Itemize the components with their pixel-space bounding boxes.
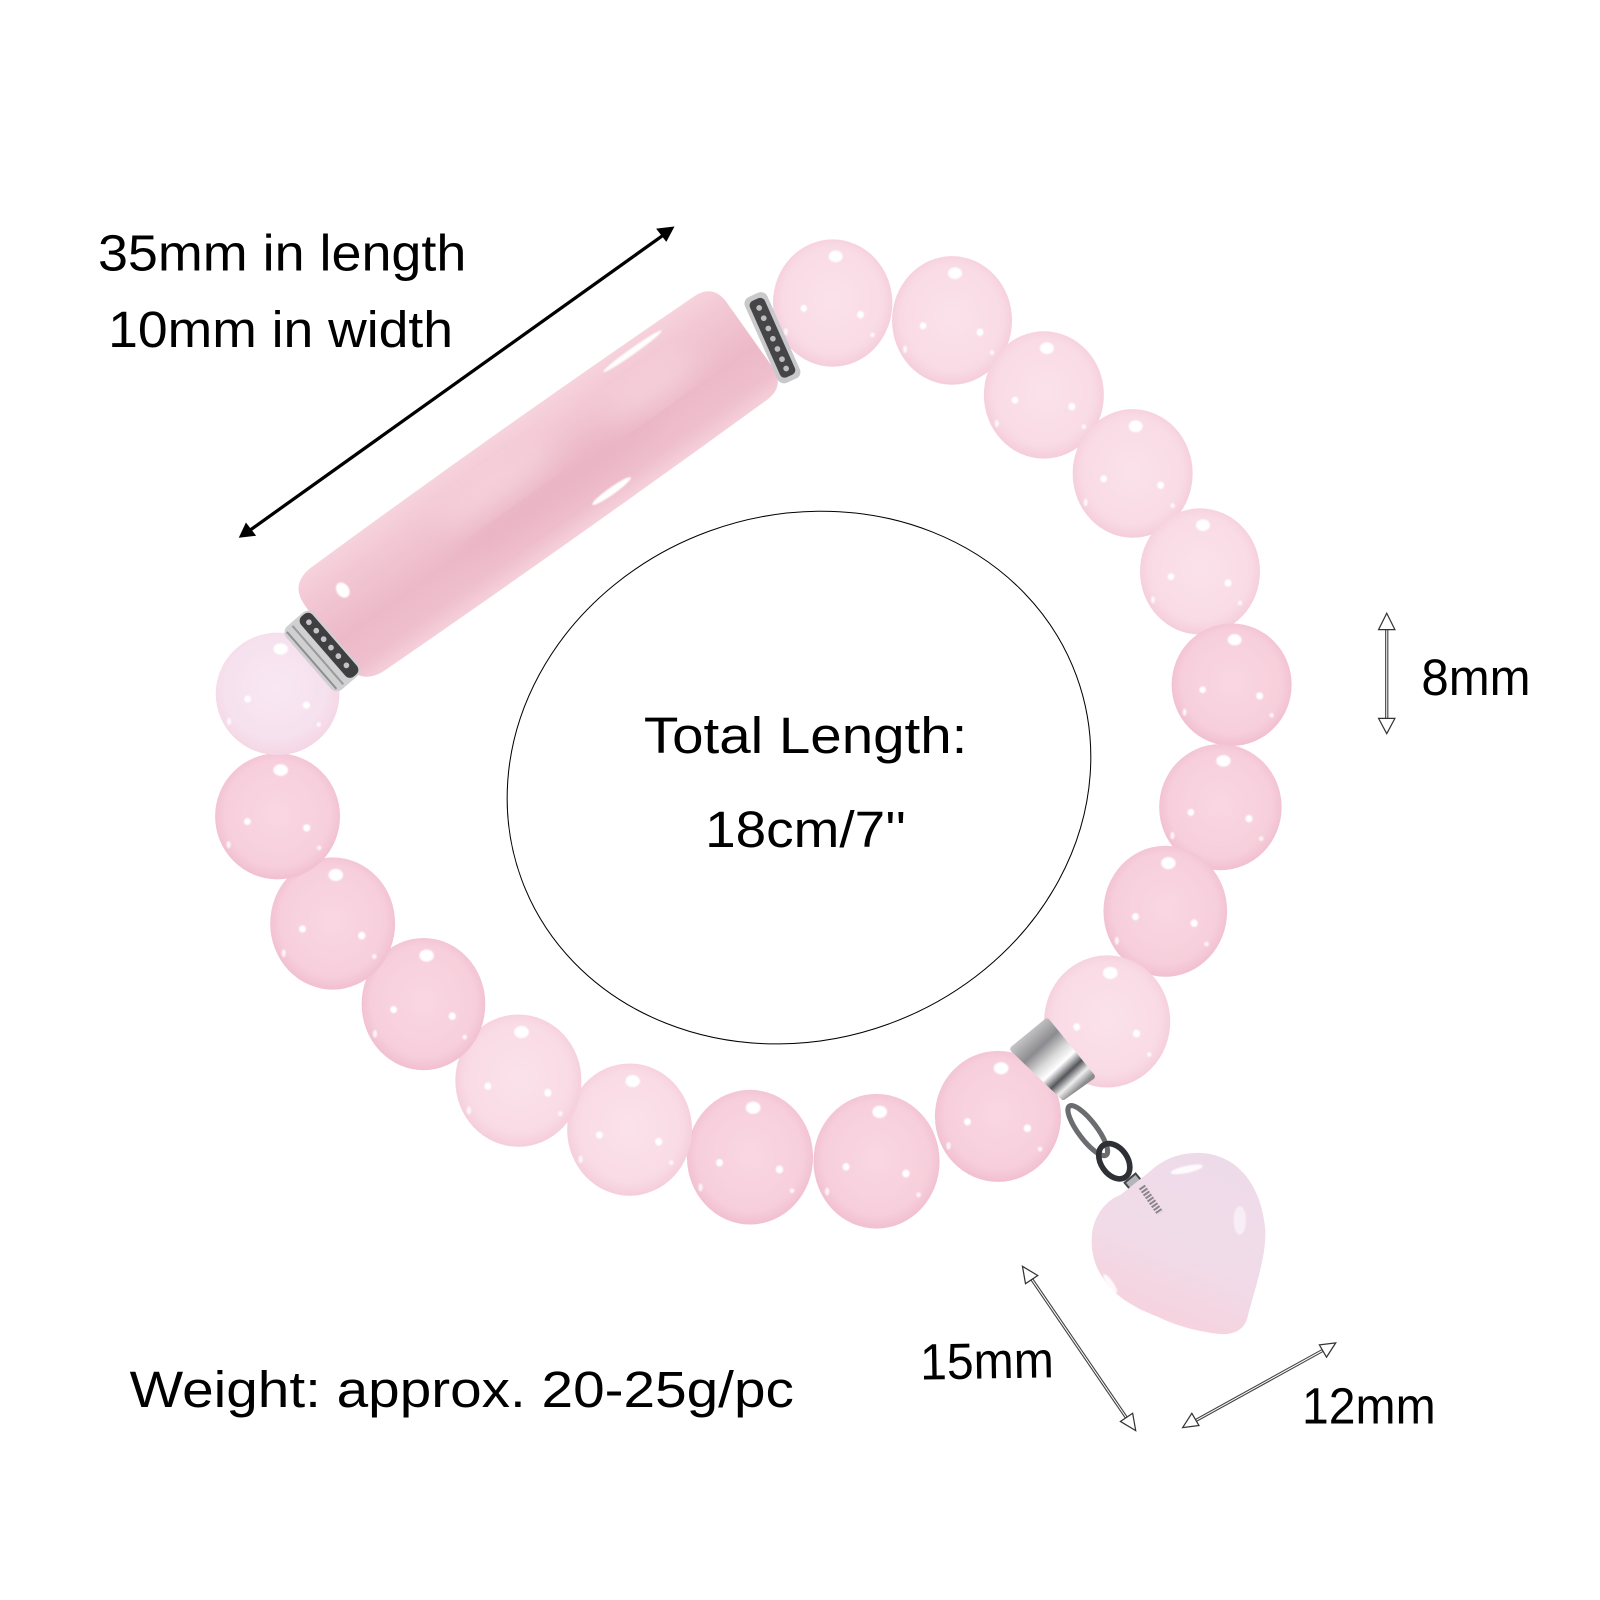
beads strand bbox=[215, 239, 1292, 1229]
bead 6 bbox=[1172, 623, 1292, 746]
bead 10 bbox=[935, 1051, 1061, 1182]
label: heart height: 15mm bbox=[920, 1331, 1054, 1391]
bead 18: pale bbox=[216, 633, 339, 755]
bead 3 bbox=[984, 331, 1104, 459]
spacer right bbox=[742, 290, 803, 386]
label: bead size: 8mm bbox=[1421, 649, 1531, 706]
label: total length heading: Total Length: bbox=[644, 707, 967, 764]
label: heart width: 12mm bbox=[1302, 1377, 1436, 1434]
heart pendant bbox=[1092, 1153, 1265, 1334]
bead 7 bbox=[1159, 744, 1282, 870]
chain links bbox=[1062, 1101, 1145, 1194]
bead 16 bbox=[270, 857, 395, 990]
silver tube charm holder bbox=[1013, 1021, 1092, 1097]
arrow: heart height bbox=[1022, 1266, 1136, 1431]
label: total length value: 18cm/7'' bbox=[705, 801, 906, 858]
spacer left bbox=[281, 607, 364, 695]
bead 17 bbox=[215, 753, 340, 879]
bead 9 bbox=[1044, 955, 1170, 1088]
bead 8 bbox=[1103, 846, 1227, 977]
label: weight: Weight: approx. 20-25g/pc bbox=[130, 1361, 794, 1418]
bead 2 bbox=[892, 256, 1012, 385]
bead 5 bbox=[1140, 508, 1260, 634]
bead 12 bbox=[687, 1090, 813, 1224]
arrow: heart width bbox=[1183, 1343, 1336, 1428]
bead 4 bbox=[1073, 409, 1193, 538]
label: bar width: 10mm in width bbox=[108, 301, 453, 358]
rose quartz bar bbox=[288, 281, 787, 688]
bead 11 bbox=[813, 1094, 940, 1229]
bead 1 bbox=[773, 239, 892, 367]
arrow: bar length bbox=[239, 227, 674, 538]
bead 13 bbox=[567, 1063, 692, 1196]
bracelet bbox=[215, 239, 1292, 1334]
total length ellipse bbox=[432, 430, 1166, 1125]
bead 14 bbox=[455, 1014, 581, 1147]
label: bar length: 35mm in length bbox=[98, 224, 466, 281]
arrow: bead size bbox=[1379, 613, 1395, 734]
bead 15 bbox=[362, 938, 485, 1070]
